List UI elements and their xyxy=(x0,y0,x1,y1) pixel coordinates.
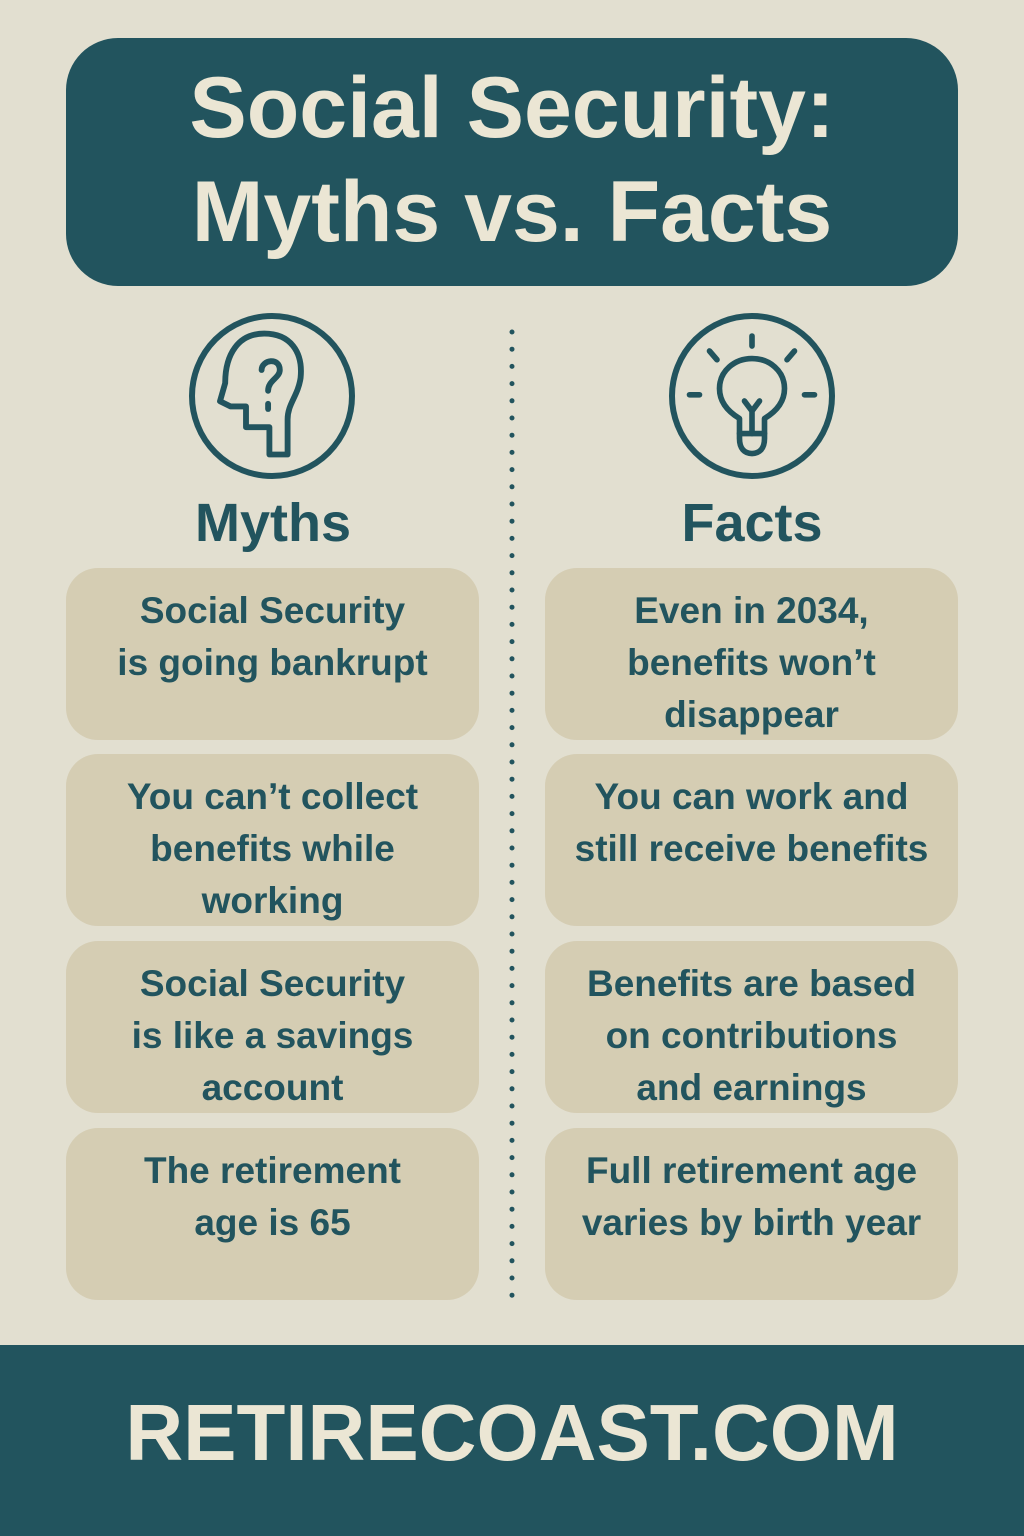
divider dots xyxy=(510,330,514,1298)
footer xyxy=(0,1345,1024,1536)
fact card 3: and earnings xyxy=(636,1067,867,1108)
myth card 3 xyxy=(66,941,479,1113)
fact card 3 xyxy=(545,941,958,1113)
fact card 1 xyxy=(545,568,958,740)
icon: head with question mark xyxy=(189,313,355,479)
myth card 2: benefits while xyxy=(150,828,395,869)
title xyxy=(66,38,958,286)
title: Social Security: xyxy=(189,60,835,156)
myth card 2: You can’t collect xyxy=(127,776,418,817)
myth card 3: Social Security xyxy=(140,963,405,1004)
myth card 4: The retirement xyxy=(144,1150,401,1191)
myth card 3: account xyxy=(202,1067,343,1108)
myth card 1: is going bankrupt xyxy=(117,642,428,683)
fact card 1: benefits won’t xyxy=(627,642,876,683)
heading: Facts: Facts xyxy=(681,493,823,553)
fact card 2: You can work and xyxy=(595,776,908,817)
fact card 2 xyxy=(545,754,958,926)
icon: light bulb xyxy=(669,313,835,479)
myth card 4 xyxy=(66,1128,479,1300)
title: Myths vs. Facts xyxy=(192,164,832,260)
footer: RETIRECOAST.COM xyxy=(125,1388,899,1477)
fact card 3: Benefits are based xyxy=(587,963,916,1004)
fact card 1: disappear xyxy=(664,694,839,735)
fact card 3: on contributions xyxy=(606,1015,897,1056)
myth card 2 xyxy=(66,754,479,926)
myth card 4: age is 65 xyxy=(194,1202,351,1243)
myth card 3: is like a savings xyxy=(132,1015,413,1056)
fact card 4 xyxy=(545,1128,958,1300)
myth card 2: working xyxy=(202,880,343,921)
fact card 1: Even in 2034, xyxy=(634,590,869,631)
fact card 4: Full retirement age xyxy=(586,1150,917,1191)
myth card 1: Social Security xyxy=(140,590,405,631)
heading: Myths: Myths xyxy=(195,493,351,553)
myth card 1 xyxy=(66,568,479,740)
fact card 4: varies by birth year xyxy=(582,1202,921,1243)
fact card 2: still receive benefits xyxy=(575,828,928,869)
